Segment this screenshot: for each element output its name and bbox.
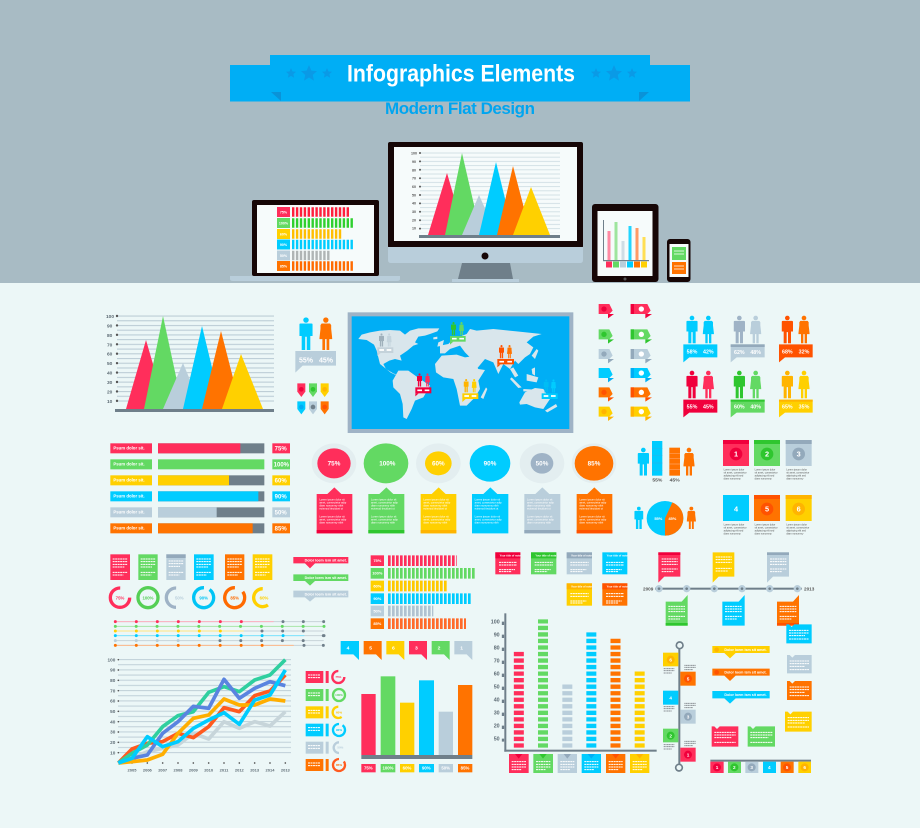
desktop monitor with triangle chart: 50	[412, 194, 416, 198]
people pairs: green 60/40	[731, 371, 765, 417]
number card 6: sit amet, consectetur	[786, 527, 809, 530]
triangle mountain chart: 60	[107, 352, 113, 358]
desktop monitor with triangle chart: 20	[412, 218, 416, 222]
text card: orange: diam nonummy nibh	[579, 504, 604, 508]
triangle mountain chart: 10	[107, 399, 113, 405]
desktop monitor with triangle chart: 70	[412, 176, 416, 180]
people pairs: yellow 65/35: 65%	[782, 405, 793, 411]
people pairs: orange 68/32: 68%	[782, 349, 793, 355]
header cards: Your title of note	[535, 553, 557, 557]
laptop with bar rows: 75%	[280, 210, 288, 214]
people pairs: red 55/45: 45%	[703, 405, 714, 411]
number card 6: Lorem ipsum dolor	[786, 524, 807, 527]
percent circles	[312, 443, 616, 483]
vertical timeline: 3	[687, 714, 690, 719]
text card: orange: Lorem ipsum dolor sit	[579, 498, 605, 502]
text card: red: euismod tincidunt ut	[319, 507, 343, 511]
map marker: oceania	[542, 379, 558, 399]
line chart: 2006	[143, 768, 153, 773]
ring gauges: 100%	[142, 595, 154, 600]
pie chart with people	[634, 501, 696, 536]
icon: man and woman	[299, 317, 332, 350]
side legend rows with rings: 85%	[336, 763, 342, 767]
numbered strip: 5	[786, 765, 789, 770]
number card 4: Lorem ipsum dolor	[724, 524, 744, 527]
numbered strip: 2	[733, 765, 736, 770]
text card: blue: amet, consectetur adip	[475, 517, 502, 521]
vertical timeline: 1	[687, 752, 690, 757]
text card: grey: Lorem ipsum dolor sit	[527, 514, 553, 518]
text card: red: Lorem ipsum dolor sit	[319, 498, 345, 502]
line chart: 30	[110, 730, 116, 735]
desktop monitor with triangle chart: 100	[411, 152, 417, 156]
laptop with bar rows: 85%	[280, 264, 288, 268]
line chart: 60	[110, 699, 116, 704]
triangle mountain chart: 50	[107, 361, 113, 367]
callout: 55% 45%: 55%	[299, 357, 314, 364]
laptop with bar rows: 60%	[280, 232, 288, 236]
desktop monitor with triangle chart: 60	[412, 185, 416, 189]
number card 3: adipiscing elit sed	[786, 475, 807, 478]
number card 3: 3	[797, 450, 801, 459]
numbered cards	[723, 440, 812, 536]
text card: blue: Lorem ipsum dolor sit	[475, 498, 500, 502]
header cards: Your title of note	[500, 553, 521, 557]
pie chart with people: 55%	[654, 516, 663, 521]
mini text cards	[110, 554, 272, 580]
text card: orange: amet, consectetur adip	[579, 517, 607, 521]
segmented percent bars: 85%	[373, 621, 382, 626]
map marker: europe	[450, 322, 466, 345]
line chart: 40	[110, 719, 116, 724]
people pairs: blue 58/42: 42%	[703, 349, 714, 355]
text card: green: euismod tincidunt ut	[371, 507, 395, 511]
text card: green: Lorem ipsum dolor sit	[371, 514, 397, 518]
people pairs: grey 62/48: 48%	[750, 350, 761, 356]
text card: yellow: diam nonummy nibh	[423, 520, 448, 524]
ribbon labels	[293, 557, 348, 602]
text card: grey: Lorem ipsum dolor sit	[527, 498, 553, 502]
corner number tags: 2	[438, 646, 441, 652]
people pairs: green 60/40: 40%	[750, 405, 761, 411]
ribbons: dolor: Dolor loem ism sit amet.	[724, 671, 767, 675]
callout: 55% 45%	[295, 351, 336, 373]
triangle mountain chart: 80	[107, 333, 113, 339]
text card: red: diam nonummy nibh	[319, 504, 344, 508]
segmented percent bars: 100%	[372, 571, 383, 576]
people pairs: orange 68/32	[779, 316, 813, 362]
triangle mountain chart: 40	[107, 370, 113, 376]
ribbons: dolor	[712, 646, 770, 704]
number card 5: adipiscing elit sed	[755, 530, 775, 533]
icon: map pins	[297, 383, 329, 414]
people pairs: red 55/45: 55%	[687, 405, 698, 411]
cards below columns	[509, 754, 649, 773]
pie chart with people: 45%	[668, 516, 677, 521]
segmented percent bars: 60%	[373, 583, 382, 588]
map marker: south america	[415, 373, 431, 396]
people gender split and pins	[110, 314, 616, 533]
text card: grey: amet, consectetur adip	[527, 501, 554, 505]
solid bar chart: 60%	[403, 766, 411, 771]
number card 5: 5	[765, 505, 769, 514]
line chart: 20	[110, 740, 116, 745]
segmented percent bars	[371, 555, 476, 629]
text card: grey: amet, consectetur adip	[527, 517, 554, 521]
lower-left block	[108, 554, 476, 773]
line chart: 10	[110, 750, 116, 755]
text card: red: amet, consectetur adip	[319, 517, 347, 521]
people bar comparison	[638, 441, 695, 484]
segmented column chart	[491, 613, 657, 752]
text card: grey	[524, 487, 560, 533]
horizontal timeline 2009 to 2013: 2013	[804, 586, 815, 591]
percent circles: 100%	[379, 461, 396, 468]
header cards: Your title of note	[607, 553, 628, 557]
number card 6: adipiscing elit sed	[786, 530, 807, 533]
text card: blue: amet, consectetur adip	[475, 501, 502, 505]
line chart: 2013	[281, 768, 291, 773]
text card: blue: euismod tincidunt ut	[475, 507, 499, 511]
background: pale page	[0, 283, 920, 828]
line chart: 2005	[128, 768, 137, 773]
horizontal timeline 2009 to 2013: 2009	[643, 586, 654, 591]
laptop with bar rows: 100%	[279, 222, 289, 226]
line chart grid	[118, 659, 291, 757]
segmented column chart: 60	[494, 671, 500, 677]
side legend rows with rings: 90%	[336, 728, 342, 732]
callout: 55% 45%: 45%	[319, 357, 334, 364]
row: 60%: 60%	[275, 479, 287, 485]
row: 50%: Psum dolor sit.	[113, 510, 145, 515]
desktop monitor with triangle chart: 80	[412, 168, 416, 172]
number card 5: diam nonummy	[755, 533, 772, 536]
text card: blue	[472, 487, 508, 533]
people pairs: orange 68/32: 32%	[799, 349, 810, 355]
world map	[350, 314, 571, 431]
header cards: Your title of note	[607, 584, 628, 588]
percent circles: 50%	[536, 461, 549, 468]
text card: green	[368, 487, 404, 533]
text card: blue: diam nonummy nibh	[475, 504, 499, 508]
ribbon labels: Dolor loem ism sit amet.	[305, 558, 347, 562]
solid bar chart: 90%	[422, 766, 431, 771]
row: 85%: 85%	[275, 527, 287, 533]
segmented column chart: 20	[494, 723, 500, 729]
segmented column chart: 80	[494, 645, 500, 651]
laptop with bar rows	[230, 200, 400, 281]
solid bar chart: 50%	[441, 766, 450, 771]
number card 6	[786, 495, 812, 536]
phone	[667, 239, 690, 282]
segmented percent bars: 90%	[373, 596, 382, 601]
number card 1: 1	[734, 450, 738, 459]
line chart: 90	[110, 668, 116, 673]
vertical timeline: 5	[687, 676, 690, 681]
percent circles: 60%	[432, 461, 445, 468]
vertical timeline	[663, 642, 696, 771]
header cards: Your title of note	[571, 553, 592, 557]
corner number tags	[341, 641, 472, 660]
title: Infographics Elements	[347, 60, 575, 88]
number card 3	[786, 440, 812, 481]
number card 3: diam nonummy	[786, 478, 804, 481]
number card 5: sit amet, consectetur	[755, 527, 778, 530]
segmented column chart: 100	[491, 619, 500, 625]
number card 4	[723, 495, 749, 536]
row: 75%: Psum dolor sit.	[113, 446, 145, 451]
people pairs: grey 62/48	[731, 316, 765, 362]
row: 85%: Psum dolor sit.	[113, 526, 145, 531]
text card: red: Lorem ipsum dolor sit	[319, 514, 345, 518]
segmented column chart: 30	[494, 710, 500, 716]
triangle mountain chart: 20	[107, 390, 113, 396]
people pairs: red 55/45	[683, 371, 717, 417]
ring gauges: 85%	[230, 595, 239, 600]
text card: red	[317, 487, 352, 533]
desktop monitor with triangle chart: 40	[412, 202, 416, 206]
triangle mountain chart	[106, 314, 274, 412]
segmented column chart: 90	[494, 632, 500, 638]
number card 5	[754, 495, 780, 536]
number card 3: sit amet, consectetur	[786, 472, 809, 475]
number card 1: diam nonummy	[724, 478, 741, 481]
text card: red: amet, consectetur adip	[319, 501, 347, 505]
number card 1: Lorem ipsum dolor	[724, 469, 744, 472]
number card 6: 6	[797, 505, 801, 514]
row: 75%	[110, 443, 290, 453]
line chart: 2011	[220, 768, 229, 773]
people pairs: green 60/40: 60%	[734, 405, 745, 411]
segmented column chart: 70	[494, 658, 500, 664]
solid bar chart: 100%	[382, 766, 394, 771]
row: 50%	[110, 507, 290, 517]
text card: green: amet, consectetur adip	[371, 517, 398, 521]
number card 4: diam nonummy	[724, 533, 741, 536]
desktop monitor with triangle chart	[388, 142, 583, 282]
number card 2: sit amet, consectetur	[755, 472, 778, 475]
number card 4: adipiscing elit sed	[724, 530, 744, 533]
side legend rows with rings	[306, 671, 347, 773]
text card: yellow: Lorem ipsum dolor sit	[423, 514, 449, 518]
number card 2: Lorem ipsum dolor	[755, 469, 775, 472]
line chart: 2008	[174, 768, 183, 773]
horizontal timeline 2009 to 2013	[643, 552, 815, 626]
row: 100%	[110, 459, 290, 469]
number card 2	[754, 440, 780, 481]
header cards	[495, 552, 628, 606]
line chart: 2012	[235, 768, 245, 773]
line chart: 50	[110, 709, 116, 714]
desktop monitor with triangle chart: 30	[412, 210, 416, 214]
line chart: 100	[108, 657, 116, 662]
text card: orange: Lorem ipsum dolor sit	[579, 514, 605, 518]
people bar comparison: 55%	[652, 478, 663, 484]
line chart	[108, 657, 291, 773]
horizontal progress rows	[110, 443, 290, 533]
ribbon labels: Dolor loem ism sit amet.	[305, 592, 347, 596]
side legend rows with rings: 100%	[335, 693, 343, 697]
banner ribbon	[230, 55, 690, 102]
people pairs: grey 62/48: 62%	[734, 350, 745, 356]
number card 5: Lorem ipsum dolor	[755, 524, 775, 527]
solid bar chart	[361, 676, 472, 772]
desktop monitor with triangle chart: 90	[412, 160, 416, 164]
header cards: Your title of note	[571, 584, 592, 588]
text card: green: diam nonummy nibh	[371, 504, 395, 508]
percent circles: 75%	[328, 461, 341, 468]
text card: yellow	[421, 487, 456, 533]
text card: yellow: euismod tincidunt ut	[423, 507, 447, 511]
line chart: 2007	[158, 768, 168, 773]
people pairs: blue 58/42	[683, 316, 717, 362]
people bar comparison: 45%	[670, 478, 680, 484]
segmented column chart: 40	[494, 697, 500, 703]
triangle mountain chart: 100	[106, 314, 114, 320]
map marker: north america	[377, 333, 393, 356]
line chart: 80	[110, 678, 116, 683]
line chart: 2013	[250, 768, 260, 773]
text card: grey: euismod tincidunt ut	[527, 507, 551, 511]
text card: yellow: diam nonummy nibh	[423, 504, 448, 508]
subtitle: Modern Flat Design	[385, 99, 535, 118]
ring gauges: 90%	[199, 595, 208, 600]
number card 4: 4	[734, 505, 739, 514]
map marker: asia	[497, 345, 514, 367]
text card: green: diam nonummy nibh	[371, 520, 395, 524]
number card 2: 2	[765, 450, 769, 459]
number card 1: adipiscing elit sed	[724, 475, 744, 478]
solid bar chart: 85%	[461, 766, 469, 771]
people pairs: yellow 65/35: 35%	[799, 405, 810, 411]
triangle mountain chart: 90	[107, 324, 113, 330]
laptop with bar rows: 90%	[280, 243, 288, 247]
triangle mountain chart: 30	[107, 380, 113, 386]
text card: yellow: Lorem ipsum dolor sit	[423, 498, 449, 502]
numbered strip: 4	[768, 765, 771, 770]
corner number tags: 5	[369, 646, 372, 652]
solid bar chart: 75%	[364, 766, 373, 771]
row: 50%: 50%	[275, 511, 287, 517]
corner number tags: 3	[415, 646, 418, 652]
dotted timeline matrix	[115, 622, 324, 645]
line chart: 70	[110, 688, 116, 693]
row: 60%	[110, 475, 290, 485]
desktop monitor with triangle chart: 10	[412, 226, 416, 230]
segmented percent bars: 75%	[373, 558, 382, 563]
numbered strip: 1	[716, 765, 719, 770]
percent circles: 90%	[484, 461, 497, 468]
line chart: 2014	[266, 768, 275, 773]
number card 4: sit amet, consectetur	[724, 527, 747, 530]
side legend rows with rings: 75%	[335, 675, 342, 679]
number card 6: diam nonummy	[786, 533, 804, 536]
row: 100%: Psum dolor sit.	[113, 462, 145, 467]
map marker: africa	[462, 379, 478, 402]
text card: green: amet, consectetur adip	[371, 501, 398, 505]
triangle mountain chart: 70	[107, 342, 113, 348]
row: 100%: 100%	[274, 463, 290, 469]
text card: orange: euismod tincidunt ut	[579, 507, 603, 511]
text card: blue: Lorem ipsum dolor sit	[475, 514, 500, 518]
ring gauges: 50%	[175, 595, 184, 600]
text card: red: diam nonummy nibh	[319, 520, 344, 524]
ribbons: dolor: Dolor loem ism sit amet.	[724, 693, 767, 697]
number card 1: sit amet, consectetur	[724, 472, 747, 475]
corner number tags: 1	[460, 646, 463, 652]
text card: grey: diam nonummy nibh	[527, 504, 551, 508]
text card: yellow: amet, consectetur adip	[423, 501, 451, 505]
row: 90%	[110, 491, 290, 501]
line chart: 2009	[189, 768, 199, 773]
numbered strip: 6	[803, 765, 806, 770]
ring gauges: 75%	[116, 595, 124, 600]
row: 90%: 90%	[275, 495, 287, 501]
text card: orange	[577, 487, 612, 533]
text card: orange: diam nonummy nibh	[579, 520, 604, 524]
text card: grey: diam nonummy nibh	[527, 520, 551, 524]
row: 75%: 75%	[275, 447, 287, 453]
vertical timeline: 2	[669, 733, 672, 738]
text card: blue: diam nonummy nibh	[475, 520, 499, 524]
side legend rows with rings: 50%	[337, 746, 344, 750]
notched note cards	[712, 624, 812, 747]
ring gauges	[110, 584, 275, 612]
number card 3: Lorem ipsum dolor	[786, 469, 807, 472]
row: 85%	[110, 523, 290, 533]
segmented percent bars: 50%	[373, 608, 382, 613]
lower-right block	[491, 552, 815, 773]
corner number tags: 6	[392, 646, 395, 652]
text card: orange: amet, consectetur adip	[579, 501, 607, 505]
ring gauges: 60%	[260, 595, 268, 600]
line chart: 2010	[204, 768, 214, 773]
ribbons: dolor: Dolor loem ism sit amet.	[724, 648, 767, 652]
vertical timeline: 4	[669, 695, 672, 700]
segmented column chart: 50	[494, 737, 500, 743]
text card: yellow: amet, consectetur adip	[423, 517, 451, 521]
number card 2: adipiscing elit sed	[755, 475, 775, 478]
numbered strip: 3	[750, 765, 753, 770]
right-hand icon column	[599, 304, 813, 536]
people pairs: blue 58/42: 58%	[687, 349, 698, 355]
icon: arrow tags	[599, 304, 652, 421]
tablet with bar chart	[592, 204, 658, 282]
row: 60%: Psum dolor sit.	[113, 478, 145, 483]
side legend rows with rings: 60%	[336, 710, 342, 714]
text card: green: Lorem ipsum dolor sit	[371, 498, 397, 502]
background: grey header	[0, 0, 920, 283]
people pairs: yellow 65/35	[779, 371, 813, 417]
laptop with bar rows: 50%	[280, 254, 288, 258]
vertical timeline: 6	[669, 657, 672, 662]
ribbon labels: Dolor loem ism sit amet.	[305, 576, 347, 580]
percent circles: 85%	[588, 461, 601, 468]
row: 90%: Psum dolor sit.	[113, 494, 145, 499]
segmented column chart: 50	[494, 684, 500, 690]
number card 2: diam nonummy	[755, 478, 772, 481]
number card 1	[723, 440, 749, 481]
corner number tags: 4	[347, 646, 350, 652]
numbered strip	[710, 760, 811, 773]
